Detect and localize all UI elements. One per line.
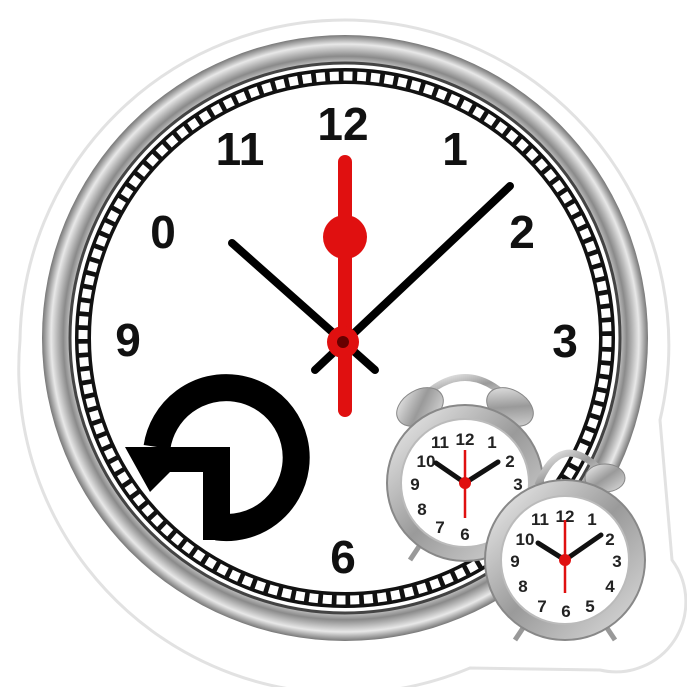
logo — [125, 388, 296, 540]
numbers: 1 — [442, 123, 468, 175]
alarm clock 2: 6 — [561, 602, 571, 621]
hands — [232, 186, 510, 370]
alarm clock 1: 10 — [417, 452, 435, 471]
numbers — [115, 98, 578, 583]
alarm clock 1: 8 — [417, 500, 427, 519]
main clock — [42, 35, 648, 641]
alarm clock 1 — [387, 378, 543, 561]
numbers: 2 — [509, 206, 535, 258]
alarm clock 1: 6 — [460, 525, 470, 544]
alarm clock 2: 1 — [587, 510, 597, 529]
alarm clock 2: 8 — [518, 577, 528, 596]
alarm clock 2: 9 — [510, 552, 520, 571]
alarm clock 2: 5 — [585, 597, 595, 616]
tick ring — [83, 76, 607, 600]
numbers: 12 — [317, 98, 369, 150]
alarm clock 2 — [485, 453, 645, 640]
red second hand — [323, 155, 367, 417]
alarm clock 2: 3 — [612, 552, 622, 571]
numbers: 3 — [552, 315, 578, 367]
numbers: 6 — [330, 531, 356, 583]
alarm clock 1: 12 — [456, 430, 474, 449]
alarm clock 2: 7 — [537, 597, 547, 616]
numbers: 0 — [150, 206, 176, 258]
alarm clock 2: 12 — [556, 507, 574, 526]
numbers: 11 — [216, 123, 264, 175]
numbers: 9 — [115, 314, 141, 366]
alarm clock 1: 1 — [487, 433, 497, 452]
alarm clock 1: 2 — [505, 452, 515, 471]
alarm clock 2: 11 — [531, 510, 549, 529]
alarm clock 2: 10 — [516, 530, 534, 549]
alarm clock 1: 3 — [513, 475, 523, 494]
alarm clock 2: 4 — [605, 577, 615, 596]
alarm clock 1: 11 — [431, 433, 449, 452]
alarm clock 1: 7 — [435, 518, 445, 537]
alarm clock 2: 2 — [605, 530, 615, 549]
alarm clock 1: 9 — [410, 475, 420, 494]
